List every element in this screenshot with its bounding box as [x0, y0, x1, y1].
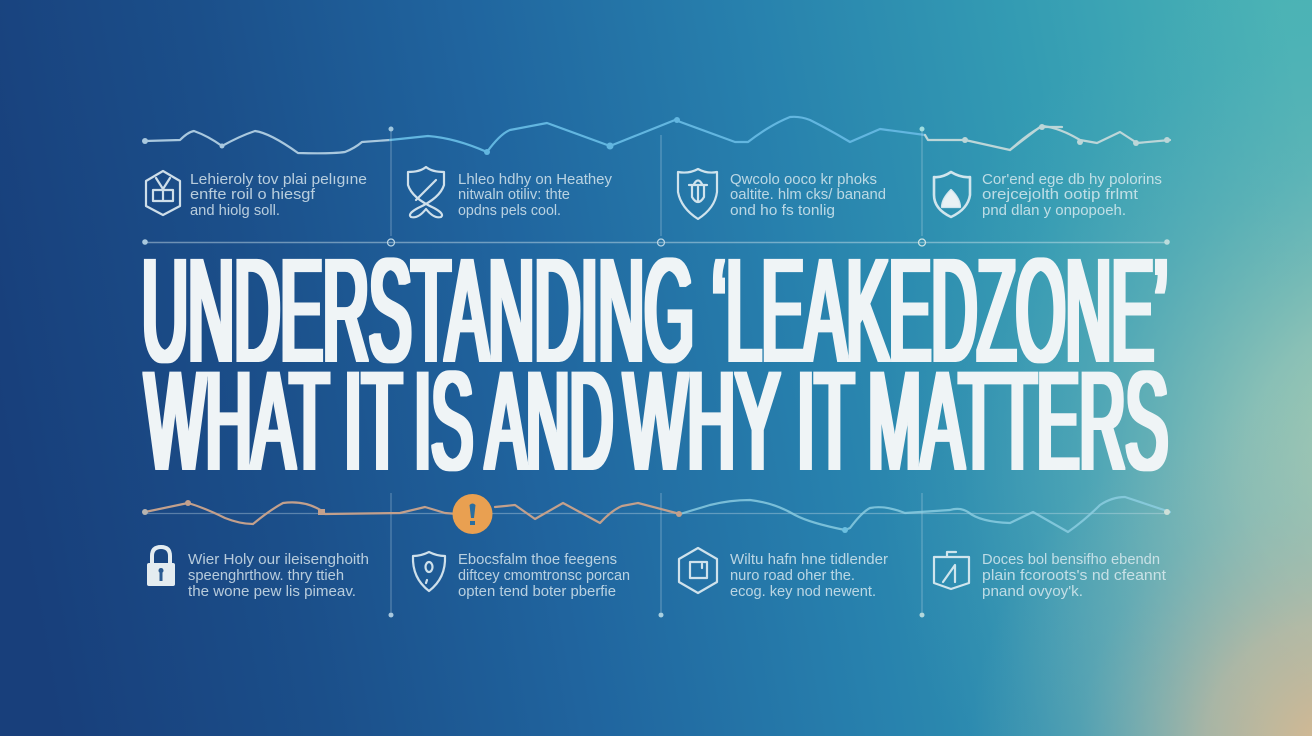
- title line 2: WHAT: [145, 342, 329, 499]
- title line 2: WHY: [624, 342, 780, 499]
- icon: shield with crossed ribbon: [408, 167, 444, 217]
- text block: bottom column 1: speenghrthow. thry ttieh: [188, 567, 344, 584]
- text block: bottom column 1: the wone pew lis pimeav.: [188, 583, 356, 600]
- text block: top column 4: orejcejolth ootip frlmt: [982, 186, 1139, 203]
- text block: top column 2: [458, 171, 612, 219]
- text block: bottom column 2: [458, 551, 630, 600]
- text block: bottom column 2: diftcey cmomtronsc porcan: [458, 567, 630, 584]
- text block: top column 1: and hiolg soll.: [190, 202, 280, 219]
- text block: bottom column 3: ecog. key nod newent.: [730, 583, 876, 600]
- text block: top column 3: [730, 171, 886, 219]
- title line 2: IT: [797, 342, 854, 499]
- icon: folder with slash: [934, 552, 969, 589]
- text block: top column 3: ond ho fs tonlig: [730, 202, 835, 219]
- text block: bottom column 4: Doces bol bensifho ebendn: [982, 551, 1160, 568]
- top wave chart line: [142, 117, 1170, 155]
- icon: shield with drop: [934, 172, 970, 217]
- text block: top column 3: Qwcolo ooco kr phoks: [730, 171, 877, 188]
- title line 2: AND: [486, 342, 613, 499]
- text block: top column 2: nitwaln otiliv: thte: [458, 186, 570, 203]
- text block: top column 3: oaltite. hlm cks/ banand: [730, 186, 886, 203]
- icon: shield with emblem: [678, 169, 717, 219]
- text block: top column 4: Cor'end ege db hy polorins: [982, 171, 1162, 188]
- icon: padlock: [147, 547, 175, 586]
- icon: hexagon with square: [679, 548, 717, 593]
- text block: bottom column 4: [982, 551, 1167, 600]
- text block: top column 2: opdns pels cool.: [458, 202, 561, 219]
- icon: orange alert circle: [452, 494, 492, 534]
- title line 2: [145, 342, 1168, 499]
- top panel: timeline and four info columns: [142, 117, 1170, 246]
- text block: bottom column 4: plain fcoroots's nd cfeannt: [982, 567, 1167, 584]
- icon: small shield: [413, 552, 445, 591]
- text block: bottom column 2: Ebocsfalm thoe feegens: [458, 551, 617, 568]
- text block: top column 2: Lhleo hdhy on Heathey: [458, 171, 612, 188]
- text block: bottom column 3: nuro road oher the.: [730, 567, 855, 584]
- text block: top column 1: enfte roil o hiesgf: [190, 186, 316, 203]
- title line 2: IS: [414, 342, 473, 499]
- text block: bottom column 2: opten tend boter pberfie: [458, 583, 616, 600]
- text block: top column 1: [190, 171, 367, 219]
- text block: bottom column 1: [188, 551, 369, 600]
- text block: bottom column 3: Wiltu hafn hne tidlender: [730, 551, 888, 568]
- bottom panel: timeline and four info columns: [142, 493, 1170, 618]
- text block: top column 4: pnd dlan y onpopoeh.: [982, 202, 1126, 219]
- title: [142, 229, 1168, 499]
- text block: bottom column 3: [730, 551, 888, 600]
- bottom wave chart line: [142, 497, 1170, 533]
- text block: bottom column 1: Wier Holy our ileisenghoith: [188, 551, 369, 568]
- text block: top column 1: Lehieroly tov plai pelıgıne: [190, 171, 367, 188]
- title line 2: IT: [344, 342, 402, 499]
- text block: bottom column 4: pnand ovyoy'k.: [982, 583, 1083, 600]
- text block: top column 4: [982, 171, 1162, 219]
- icon: hexagon with book: [146, 171, 180, 215]
